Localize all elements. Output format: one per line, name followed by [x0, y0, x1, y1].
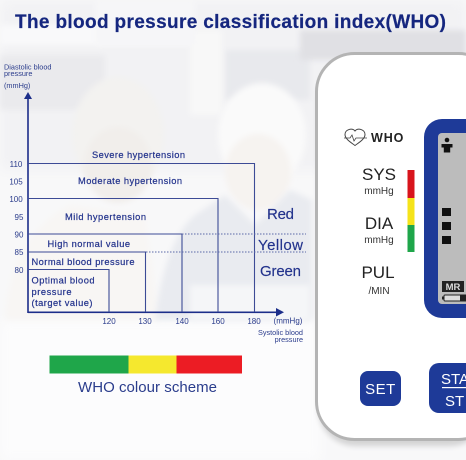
- y axis title: (mmHg): [4, 81, 30, 90]
- y tick labels: 80: [15, 266, 24, 275]
- x tick labels: 120: [102, 317, 116, 326]
- zone lines: [28, 164, 254, 312]
- x axis title: pressure: [275, 335, 303, 344]
- label: SYS: SYS: [362, 165, 396, 184]
- MR badge: MR: [446, 282, 461, 293]
- zone labels: pressure: [32, 287, 72, 297]
- colour labels: Green: [260, 263, 301, 280]
- colour labels: Yellow: [258, 237, 303, 254]
- device colour bar: [408, 170, 414, 252]
- label: SYS: [362, 165, 396, 197]
- SET button: [360, 371, 401, 406]
- zone labels: Moderate hypertension: [78, 176, 182, 186]
- x axis title: Systolic blood: [258, 328, 303, 337]
- x tick labels: (mmHg): [274, 316, 303, 326]
- label: DIA: [364, 214, 394, 246]
- label: PUL: /MIN: [368, 286, 390, 297]
- chart: classification zones: [9, 92, 306, 344]
- battery icon: [442, 295, 466, 301]
- x tick labels: 180: [247, 317, 261, 326]
- icon: person: [442, 138, 452, 152]
- label: DIA: mmHg: [364, 235, 394, 246]
- zone labels: (target value): [32, 298, 92, 308]
- x tick labels: 140: [175, 317, 189, 326]
- zone labels: Optimal blood: [32, 276, 94, 286]
- y tick labels: [9, 160, 24, 275]
- colour labels: [258, 206, 303, 280]
- label: SYS: mmHg: [364, 186, 394, 197]
- zone labels: High normal value: [48, 239, 130, 249]
- WHO colour scheme bar: [50, 356, 242, 374]
- colour labels: Red: [267, 206, 294, 223]
- zone labels: Mild hypertension: [65, 212, 146, 222]
- MR badge: [442, 281, 464, 293]
- screen level markers: [442, 208, 451, 244]
- zone labels: Normal blood pressure: [32, 257, 134, 267]
- y tick labels: 110: [10, 160, 23, 169]
- label: WHO logo: WHO: [371, 131, 404, 145]
- axes: [24, 92, 284, 316]
- y tick labels: 100: [9, 195, 23, 204]
- START/STOP button: ST: [445, 393, 464, 410]
- x tick labels: 160: [211, 317, 225, 326]
- title: The blood pressure classification index(WHO): [15, 12, 446, 33]
- START/STOP button: [429, 363, 466, 413]
- label: PUL: [361, 263, 395, 297]
- label: DIA: DIA: [365, 214, 394, 233]
- y axis title: [4, 62, 51, 90]
- dotted zone boundaries: [146, 234, 306, 252]
- zone labels: [32, 150, 185, 308]
- y tick labels: 85: [15, 248, 24, 257]
- label: WHO logo: [344, 129, 404, 146]
- SET button: SET: [365, 381, 396, 398]
- label: PUL: PUL: [361, 263, 395, 282]
- x tick labels: 130: [138, 317, 152, 326]
- zone labels: Severe hypertension: [92, 150, 185, 160]
- y axis title: pressure: [4, 69, 32, 78]
- x axis title: [258, 328, 303, 344]
- y axis title: Diastolic blood: [4, 62, 51, 72]
- device screen: [424, 119, 466, 318]
- y tick labels: 105: [9, 178, 23, 186]
- x tick labels: [102, 316, 303, 326]
- y tick labels: 95: [15, 213, 24, 222]
- WHO colour scheme caption: WHO colour scheme: [78, 379, 217, 396]
- y tick labels: 90: [15, 230, 24, 240]
- device body: [316, 54, 466, 446]
